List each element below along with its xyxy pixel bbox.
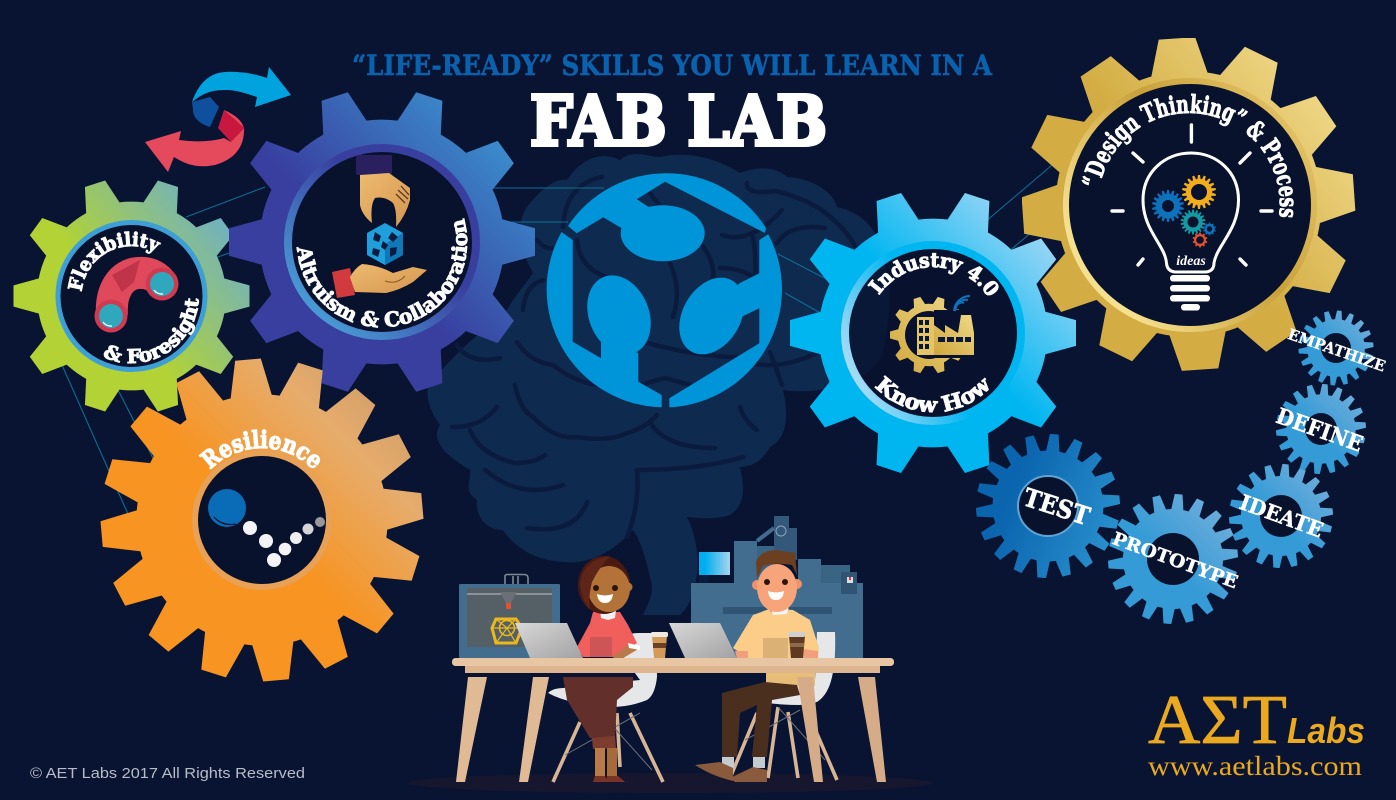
gear text: resilience: Resilience	[198, 429, 320, 470]
gear: define	[1273, 384, 1366, 474]
table	[452, 658, 894, 782]
gear: industry 4.0 know how	[790, 193, 1076, 473]
brand logo: aet labs: Labs	[1287, 710, 1365, 751]
icon: light bulb with gears	[1112, 125, 1272, 310]
title line: “LIFE-READY” SKILLS YOU WILL LEARN IN A	[352, 49, 993, 82]
fab lab scene	[408, 516, 932, 793]
gear: empathize	[1285, 310, 1388, 386]
gear text: altruism and collaboration: Altruism & Collaboration	[296, 218, 468, 328]
brand logo: aet labs: AΣT	[1148, 682, 1287, 759]
floor shadow	[408, 773, 932, 793]
gear text: flexibility: Flexibility	[67, 231, 162, 292]
gear label: IDEATE	[1236, 489, 1327, 543]
chair: man	[723, 632, 837, 780]
cnc machine	[691, 516, 863, 658]
brand logo: aet labs	[1148, 682, 1365, 781]
icon: lower hand	[332, 264, 427, 298]
icon: gear factory	[888, 294, 974, 376]
gear label: DEFINE	[1273, 403, 1366, 458]
gear text: know how: Know How	[874, 375, 989, 413]
gear: ideate	[1229, 464, 1333, 568]
swap arrows icon	[145, 67, 291, 172]
gear text: industry 4.0: Industry 4.0	[867, 252, 999, 296]
connector lines	[62, 160, 1058, 514]
gear label: PROTOTYPE	[1109, 528, 1240, 593]
chair: woman	[548, 633, 663, 782]
gear label: EMPATHIZE	[1285, 325, 1388, 375]
gear: altruism and collaboration	[229, 92, 535, 392]
brain silhouette	[427, 154, 889, 615]
copyright: © AET Labs 2017 All Rights Reserved	[30, 765, 305, 782]
3d printer	[459, 574, 560, 658]
brand logo: aet labs: www.aetlabs.com	[1148, 751, 1362, 781]
icon: binoculars	[94, 260, 178, 332]
icon: upper hand	[356, 155, 410, 227]
fab lab logo	[547, 173, 782, 407]
gear: design thinking and process	[1022, 38, 1356, 371]
coffee cups	[651, 632, 805, 658]
gear text: foresight: & Foresight	[104, 298, 200, 364]
bulb label: ideas	[1176, 254, 1206, 269]
woman	[563, 556, 640, 782]
icon: bouncing ball	[208, 489, 325, 567]
gear: resilience	[100, 358, 424, 682]
title FAB LAB: FAB LAB	[530, 82, 827, 162]
gear: test	[976, 434, 1120, 578]
laptops	[515, 623, 737, 658]
gear label: TEST	[1020, 483, 1094, 531]
gear: flexibility and foresight	[14, 180, 250, 412]
gear: prototype	[1108, 494, 1240, 624]
man	[695, 550, 819, 782]
gear text: design thinking and process: “Design Thinking” & Process	[1081, 93, 1294, 218]
icon: hex cube	[367, 223, 403, 265]
